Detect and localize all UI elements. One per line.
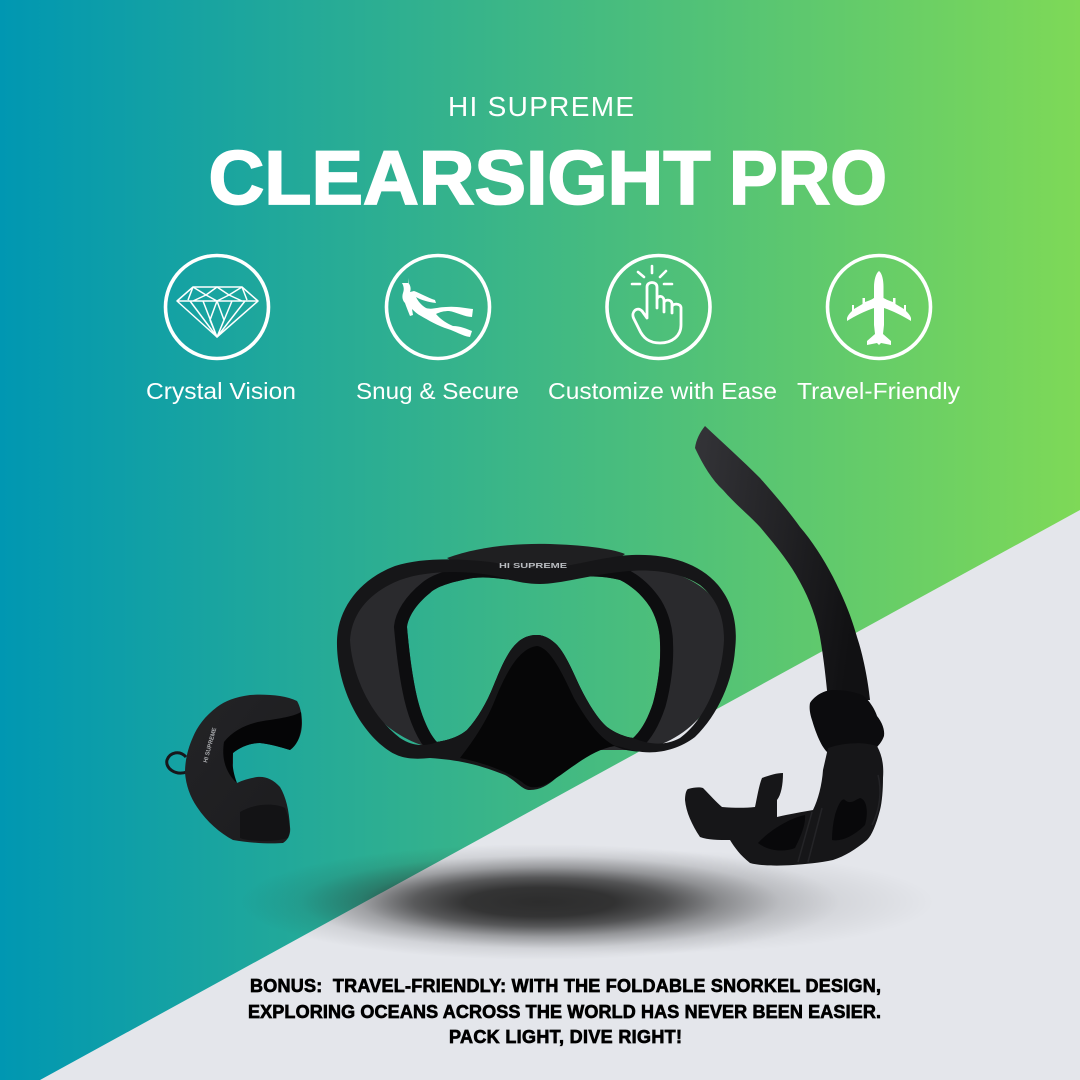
product: mouthpiece xyxy=(167,695,302,843)
snorkel body ribs xyxy=(798,775,880,862)
brand name: HI SUPREME xyxy=(448,91,634,122)
mouthpiece inner shadow xyxy=(223,712,301,783)
mask nose shade xyxy=(460,646,615,787)
mask frame and nose xyxy=(337,555,736,790)
mask side skirt xyxy=(345,568,729,750)
snorkel body and mouthpiece xyxy=(685,743,883,866)
title: CLEARSIGHT xyxy=(208,136,710,221)
icon: airplane xyxy=(828,256,930,358)
label: Snug & Secure xyxy=(356,378,519,404)
mask inner dark ring xyxy=(407,576,660,742)
icon: diamond xyxy=(166,256,268,358)
mouthpiece body xyxy=(185,695,302,843)
bonus text: PACK LIGHT, DIVE RIGHT! xyxy=(449,1027,682,1047)
snorkel body detail xyxy=(758,798,867,851)
product: snorkel xyxy=(685,426,884,866)
label: Crystal Vision xyxy=(146,378,296,404)
mouthpiece strap loop xyxy=(167,753,187,773)
ground shadow xyxy=(240,844,935,960)
icon: pointing hand xyxy=(607,256,710,358)
mouthpiece logo text: HI SUPREME xyxy=(203,727,218,764)
product: diving mask xyxy=(337,544,736,790)
grey diagonal panel xyxy=(40,510,1080,1080)
feature: crystal vision xyxy=(146,256,296,404)
snorkel tube xyxy=(695,426,870,700)
label: Travel-Friendly xyxy=(797,378,960,404)
label: Customize with Ease xyxy=(548,378,777,404)
mouthpiece lower panel xyxy=(240,805,289,841)
snorkel clip xyxy=(810,690,884,752)
mask logo text: HI SUPREME xyxy=(499,563,568,570)
icon: diver xyxy=(386,256,490,358)
feature: travel friendly xyxy=(797,256,960,404)
title: PRO xyxy=(729,136,887,221)
bonus text: EXPLORING OCEANS ACROSS THE WORLD HAS NEVER BEEN EASIER. xyxy=(248,1002,881,1022)
bonus text: BONUS: TRAVEL-FRIENDLY: WITH THE FOLDABLE SNORKEL DESIGN, xyxy=(250,976,881,996)
feature: customize with ease xyxy=(548,256,777,404)
feature: snug and secure xyxy=(356,256,519,404)
mask top tab xyxy=(447,544,625,572)
bonus text xyxy=(248,976,881,1047)
